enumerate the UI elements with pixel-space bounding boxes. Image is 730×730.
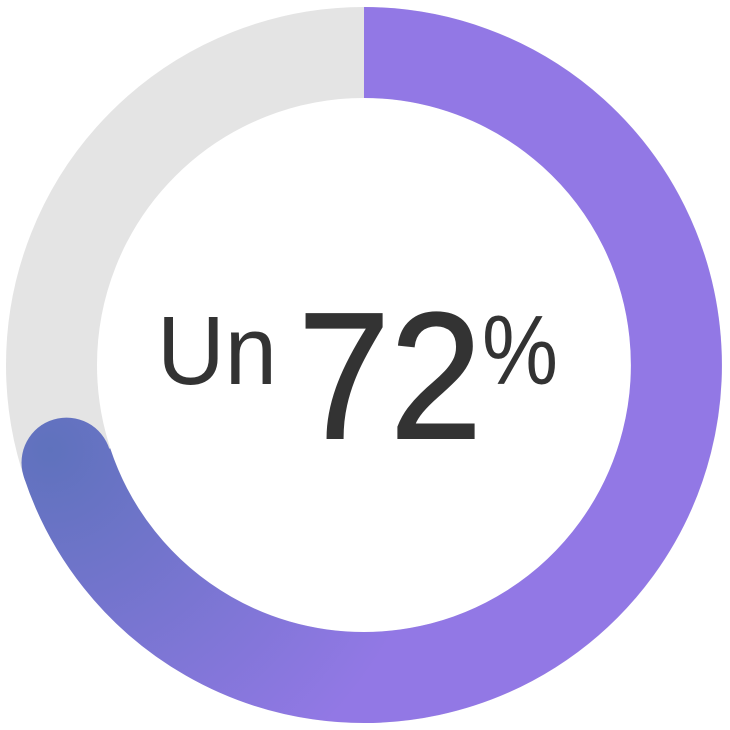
donut value arc [22,52,676,677]
center label: Un [157,296,277,405]
center label: % [482,295,558,405]
center label [157,276,558,477]
donut track [52,52,676,678]
center label: 72 [298,276,482,477]
